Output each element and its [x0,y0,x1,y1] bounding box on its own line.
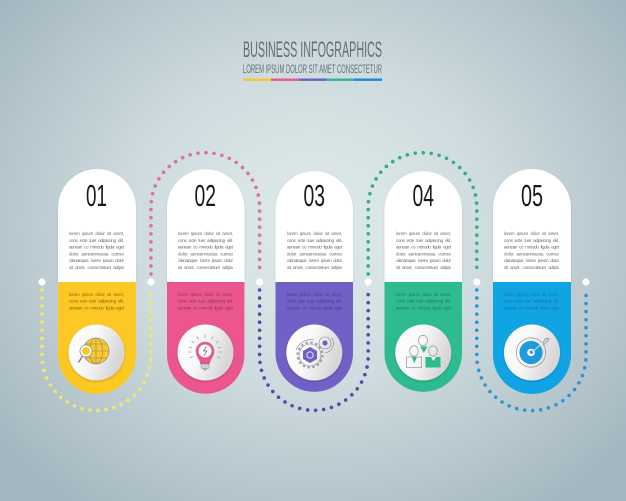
body text: cons ecte tuer adipiscing elit. [69,238,124,243]
body text: dolor. aeneanmassa. cumso [287,252,342,256]
body text: sit amet, consectetuer adipis [178,265,234,270]
coloured body text: aenean co mmodo ligula eget [287,306,343,310]
body text: aenean co mmodo ligula eget [504,244,560,250]
purple card bottom [276,282,353,392]
number: 04 [412,178,434,213]
node circles [38,278,590,286]
coloured body text: lorem ipsum dolor sit amet, [504,292,559,297]
coloured body text: aenean co mmodo ligula eget [178,306,234,310]
body text: lorem ipsum dolor sit amet, [69,231,124,236]
icon disc [286,324,342,380]
coloured body text: cons ecte tuer adipiscing elit. [69,298,124,304]
body text [396,231,452,270]
body text: dolor. aeneanmassa. cumso [396,252,451,256]
panel: step 03 [276,171,353,392]
panel: step 01 [58,169,136,394]
number: 05 [521,178,543,213]
panel: step 02 [167,169,244,394]
colour underline [243,78,382,81]
coloured body text: cons ecte tuer adipiscing elit. [504,298,559,304]
blue card bottom [493,282,571,394]
subtitle: LOREM IPSUM DOLOR SIT AMET CONSECTETUR [243,64,382,76]
body text [287,231,343,270]
coloured body text: cons ecte tuer adipiscing elit. [287,298,342,304]
green card bottom [384,282,462,392]
body text: aenean co mmodo ligula eget [178,244,234,250]
white card top [493,169,571,282]
dotted connector: pink [151,153,260,274]
icon: target and arrow [516,338,549,367]
icon: three people [406,335,440,368]
body text: dolor. aeneanmassa. cumso [504,252,559,256]
icon disc [395,324,451,380]
body text: sit amet, consectetuer adipis [69,265,125,270]
coloured body text: aenean co mmodo ligula eget [504,306,560,310]
coloured body text [178,292,234,310]
body text: cons ecte tuer adipiscing elit. [178,238,233,243]
body text: ciisnatoque. lorem ipsum dolor [287,258,342,263]
body text: aenean co mmodo ligula eget [396,244,452,250]
body text: ciisnatoque. lorem ipsum dolor [178,258,234,263]
text: BUSINESS INFOGRAPHICS [243,37,382,62]
body text [178,231,234,270]
coloured body text: cons ecte tuer adipiscing elit. [178,298,233,304]
dotted connector: blue [477,290,586,411]
body text [69,231,125,270]
number: 01 [86,178,107,213]
body text: sit amet, consectetuer adipis [396,265,452,270]
dotted connector: green [368,153,477,274]
coloured body text: lorem ipsum dolor sit amet, [69,292,124,297]
title block [243,37,382,81]
white card top [384,171,462,282]
white card top [58,169,136,282]
body text: sit amet, consectetuer adipis [287,265,343,270]
icon disc [178,324,234,380]
white card top [276,171,353,282]
body text: cons ecte tuer adipiscing elit. [396,238,451,243]
body text: sit amet, consectetuer adipis [504,265,560,270]
white card top [167,169,244,282]
panel: step 04 [384,171,462,392]
icon disc [504,324,560,380]
pink card bottom [167,282,244,394]
body text: dolor. aeneanmassa. cumso [178,252,233,256]
coloured body text: aenean co mmodo ligula eget [69,306,125,310]
coloured body text: lorem ipsum dolor sit amet, [178,292,233,297]
coloured body text: aenean co mmodo ligula eget [396,306,452,310]
body text: lorem ipsum dolor sit amet, [396,231,451,236]
coloured body text [504,292,560,310]
icon disc [68,324,124,380]
body text [504,231,560,270]
icon: gears [296,337,333,368]
icon: light bulb [188,334,222,370]
coloured body text [69,292,125,310]
body text: ciisnatoque. lorem ipsum dolor [396,258,452,263]
number: 02 [194,178,216,213]
body text: cons ecte tuer adipiscing elit. [287,238,342,243]
icon: globe and magnifier [78,338,109,364]
body text: dolor. aeneanmassa. cumso [69,252,124,256]
body text: aenean co mmodo ligula eget [287,244,343,250]
body text: lorem ipsum dolor sit amet, [504,231,559,236]
body text: cons ecte tuer adipiscing elit. [504,238,559,243]
body text: aenean co mmodo ligula eget [69,244,125,250]
coloured body text: cons ecte tuer adipiscing elit. [396,298,451,304]
coloured body text: lorem ipsum dolor sit amet, [287,292,342,297]
body text: lorem ipsum dolor sit amet, [178,231,233,236]
body text: ciisnatoque. lorem ipsum dolor [504,258,560,263]
coloured body text [396,292,452,310]
body text: lorem ipsum dolor sit amet, [287,231,342,236]
dotted connector: yellow [42,290,151,410]
panel: step 05 [493,169,571,394]
body text: ciisnatoque. lorem ipsum dolor [69,258,124,263]
yellow card bottom [58,282,136,394]
number: 03 [304,178,325,213]
coloured body text [287,292,343,310]
dotted connector: indigo [260,290,368,410]
coloured body text: lorem ipsum dolor sit amet, [396,292,451,297]
